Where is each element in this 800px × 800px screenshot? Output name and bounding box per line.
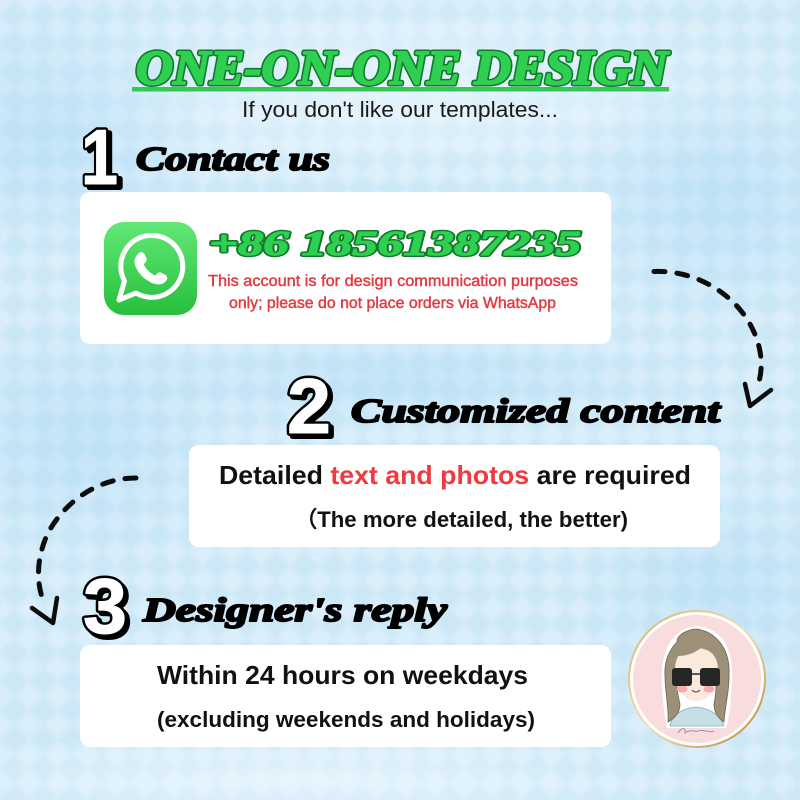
shirt <box>670 707 724 726</box>
step 2 number: 2 <box>287 362 331 450</box>
signature flourish <box>678 728 714 733</box>
phone number: +86 18561387235 <box>209 224 581 263</box>
notice text: This account is for design communication purposes <box>208 273 578 290</box>
arrow: step 1 to step 2 <box>654 271 771 406</box>
title: ONE-ON-ONE DESIGN: ONE-ON-ONE DESIGN <box>136 40 670 95</box>
note: （The more detailed, the better) <box>295 507 628 532</box>
icon: designer avatar <box>629 611 765 747</box>
notice text <box>208 273 578 312</box>
heading: Customized content: Customized content <box>351 393 722 430</box>
step 3 number: 3 <box>83 562 127 650</box>
panel: content requirements <box>189 445 720 547</box>
phone number <box>209 224 581 263</box>
subtitle: If you don't like our templates... <box>242 97 558 122</box>
reply time line: Within 24 hours on weekdays <box>157 660 528 690</box>
title: ONE-ON-ONE DESIGN: ONE-ON-ONE DESIGN <box>136 40 670 95</box>
requirement line: Detailed text and photos are required <box>219 460 691 490</box>
face <box>675 648 718 701</box>
reply exclusions: (excluding weekends and holidays) <box>157 707 535 732</box>
step 2 number: 2 <box>290 365 334 453</box>
panel: reply time <box>80 645 611 747</box>
step 1 number: 1 <box>81 113 118 201</box>
heading: Designer's reply: Designer's reply <box>142 592 448 629</box>
sunglasses <box>672 668 692 686</box>
step 1 number: 1 <box>81 113 118 201</box>
blush <box>676 686 688 692</box>
sticker outline <box>662 626 732 728</box>
notice text: only; please do not place orders via WhatsApp <box>229 295 556 312</box>
arrow: step 2 to step 3 <box>32 478 136 623</box>
step 3 number: 3 <box>83 562 127 650</box>
heading: Contact us: Contact us <box>136 141 330 178</box>
smile <box>692 690 700 692</box>
step 2 number: 2 <box>287 362 331 450</box>
step 1 number: 1 <box>85 116 122 204</box>
phone number: +86 18561387235 <box>209 224 581 263</box>
hair <box>665 629 729 722</box>
panel: contact card <box>80 192 611 344</box>
step 3 number: 3 <box>86 565 130 653</box>
icon: WhatsApp <box>104 222 197 315</box>
